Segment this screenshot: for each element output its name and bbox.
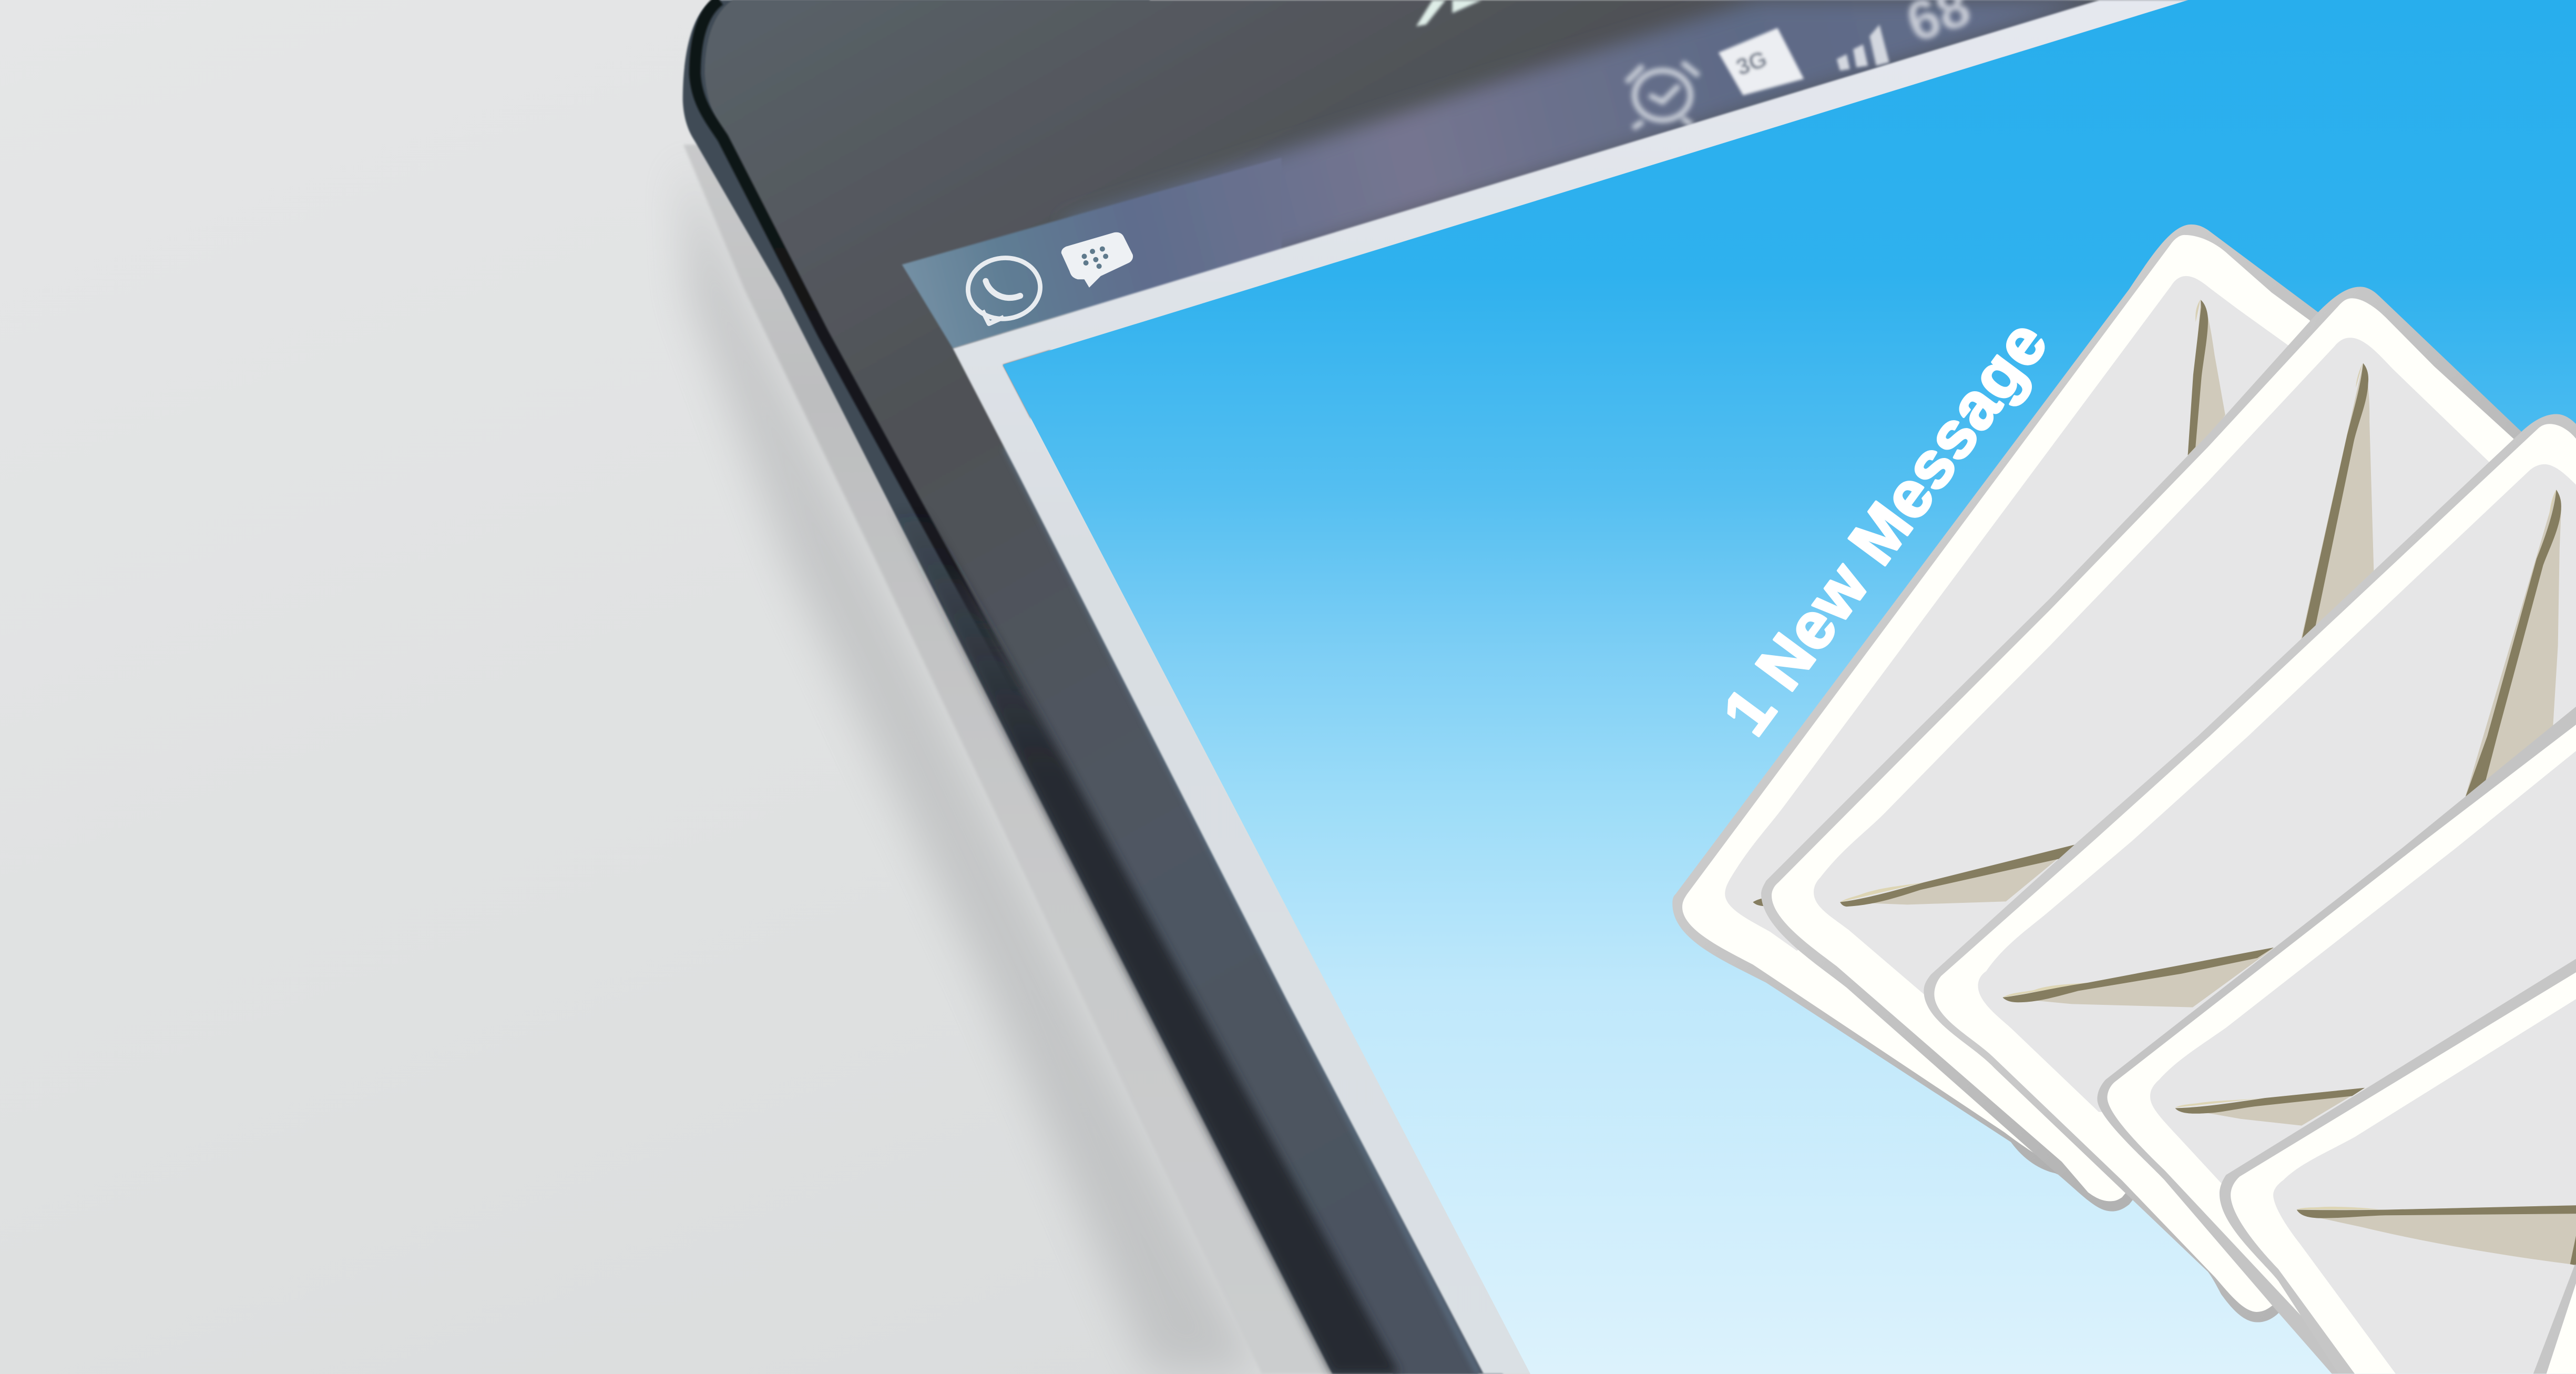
- envelope 1: [1672, 225, 2349, 1175]
- fold line: envelope 5 left: [2297, 1205, 2576, 1218]
- phone: [683, 0, 2202, 1373]
- icon: alarm clock: [1627, 63, 1699, 128]
- phone shadow: [683, 156, 1262, 1374]
- fold highlight: envelope 5 left: [2297, 1207, 2379, 1209]
- fold highlight: envelope 3 left: [2002, 983, 2088, 998]
- fold line: envelope 1 top: [2188, 300, 2208, 455]
- edge: next envelope white: [2547, 1284, 2576, 1373]
- fold: envelope 4 left: [2175, 1088, 2365, 1126]
- fold line: envelope 5 top: [2570, 1236, 2576, 1265]
- envelope 4: [2097, 707, 2576, 1373]
- envelope 3: [1924, 414, 2576, 1322]
- fold: envelope 2 left: [1840, 844, 2075, 904]
- screen edge blue tint: [1005, 447, 1478, 1374]
- fold line: envelope 2 left: [1840, 844, 2075, 907]
- fold: envelope 3 left: [2002, 948, 2274, 1007]
- phone dark side lower: [892, 510, 1399, 1374]
- fold highlight: envelope 3 top: [2549, 490, 2556, 520]
- phone black edge line upper: [695, 0, 1019, 690]
- fold highlight: envelope 2 left: [1840, 882, 1924, 902]
- fold line: envelope 3 top: [2465, 490, 2561, 800]
- icon: chat dots: [1061, 232, 1133, 288]
- screen: blue gradient: [1003, 0, 2576, 1374]
- fold line: envelope 3 left: [2002, 948, 2274, 1002]
- fold highlight: envelope 1 top: [2195, 299, 2201, 322]
- phone silver side: [683, 145, 1341, 1374]
- brand logo fragment: [1416, 0, 1482, 26]
- fold: envelope 3 top: [2465, 490, 2561, 800]
- envelope 2: [1761, 287, 2563, 1212]
- fold highlight: envelope 4 left: [2175, 1098, 2265, 1107]
- screen white frame: [953, 0, 2193, 1374]
- icon: network box: 3G: [1733, 46, 1771, 80]
- headline: 1 New Message: 1 New Message: [1709, 307, 2062, 748]
- fold highlight: envelope 2 top: [2356, 363, 2363, 388]
- fold: envelope 1 top: [2188, 300, 2225, 455]
- edge: next envelope outline: [2533, 1264, 2576, 1373]
- status bar sharp part: [902, 158, 1282, 349]
- phone outer body edge: [683, 0, 1478, 1374]
- fold line: envelope 4 left: [2175, 1088, 2365, 1114]
- envelope 5: [2220, 959, 2576, 1373]
- fold line: envelope 1 left: [1753, 897, 1767, 906]
- icon: signal bars: [1837, 25, 1889, 70]
- fold: envelope 2 top: [2300, 363, 2374, 646]
- fold line: envelope 2 top: [2301, 363, 2368, 643]
- phone bezel: [705, 0, 2202, 1374]
- fold: envelope 5 left: [2297, 1205, 2576, 1264]
- icon: network box: [1719, 28, 1804, 95]
- status bar blurred part: [1068, 0, 2100, 320]
- icon: whatsapp: [965, 255, 1043, 324]
